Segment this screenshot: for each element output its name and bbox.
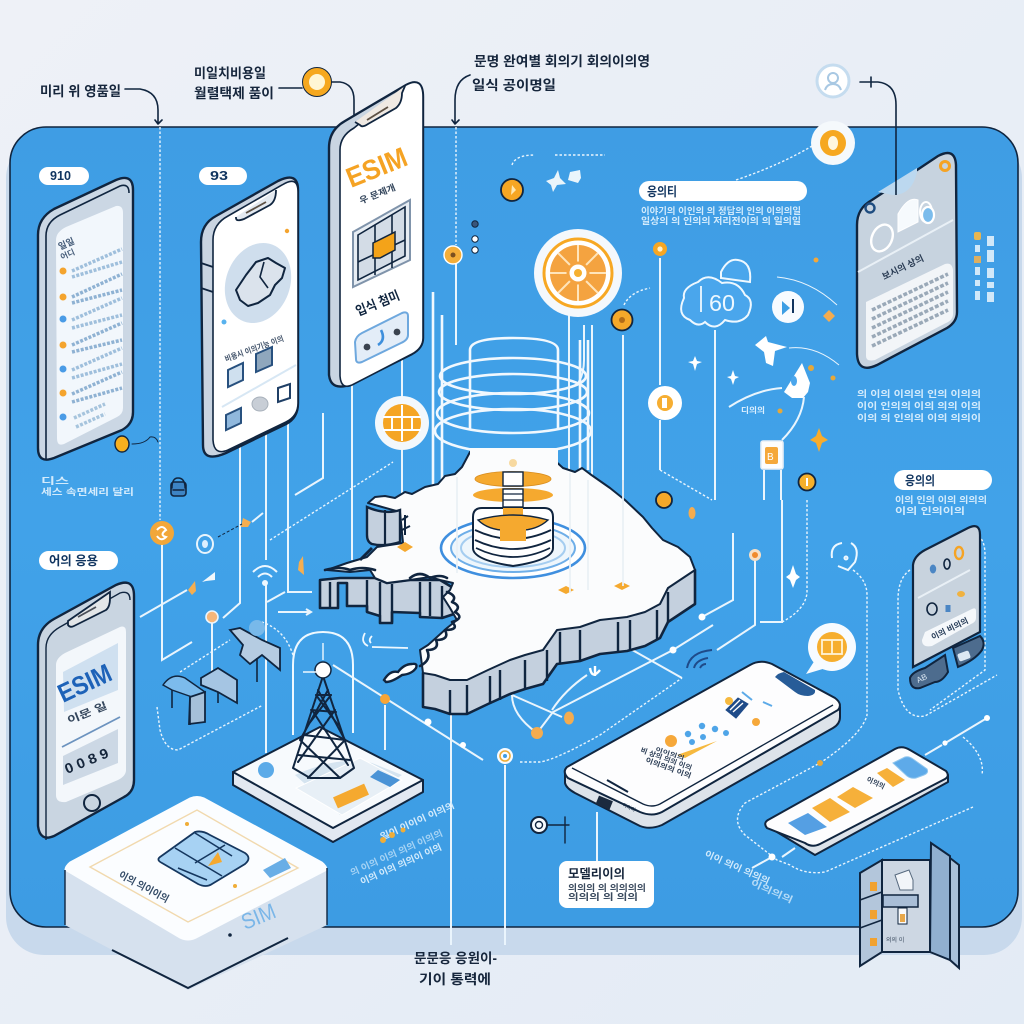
text card bottom: 의의의 의 의의의의 bbox=[568, 883, 646, 893]
stack bbox=[473, 459, 553, 566]
map disc bbox=[214, 234, 302, 332]
connector lines bbox=[140, 127, 997, 945]
text caption diagonal: 이의의의 bbox=[749, 878, 794, 905]
list rows bbox=[56, 235, 122, 427]
caption near tower: 일이 이이이 이의의 bbox=[378, 799, 456, 842]
text block right middle bbox=[857, 389, 981, 423]
panel: lower right phone bbox=[910, 526, 984, 688]
icon: globe badge bbox=[375, 396, 429, 450]
panel: bottom-left phone: 이문 일 bbox=[65, 699, 109, 727]
icon: callout bubble bbox=[806, 623, 856, 674]
pill label: 93 bbox=[210, 169, 228, 183]
heading labels above the panel bbox=[40, 54, 650, 124]
SIM chip bbox=[353, 200, 410, 287]
label centre bbox=[472, 54, 650, 93]
caption near tower: 의 이의 이의 의의 이의의 bbox=[349, 828, 444, 878]
pill label bbox=[39, 551, 118, 570]
icon: cloud 160: 60 bbox=[709, 290, 735, 316]
panel: label right lower: 응의의 bbox=[905, 474, 935, 488]
panel: bottom-left phone: 0 0 8 9 bbox=[62, 745, 111, 777]
panel: bottom-left phone bbox=[38, 551, 134, 840]
panel: large landscape phone: 이의의 bbox=[621, 801, 637, 814]
icon: orange markers near the phone bbox=[531, 549, 823, 766]
text block: upper centre: 일상의 의 인의의 저리전이의 의 일의일 bbox=[641, 215, 801, 226]
text column right of phone bbox=[974, 232, 994, 302]
panel: small landscape card: 이의의 bbox=[865, 775, 886, 791]
label centre: 일식 공이명일 bbox=[472, 78, 556, 93]
panel: tall eSIM phone: 우 문제개 bbox=[358, 181, 397, 206]
label left: 미리 위 영품일 bbox=[40, 84, 121, 99]
icon: orange pin dot and coins bbox=[612, 242, 682, 420]
text caption diagonal: 이이 의이 의의의 bbox=[703, 849, 771, 886]
panel: label right lower: 이의 인의 이의 의의의 bbox=[895, 495, 987, 505]
icon: sparkle bbox=[786, 565, 800, 588]
icon: isometric routers left of tower bbox=[163, 620, 280, 725]
text block: upper centre bbox=[639, 181, 807, 226]
icon: lock bbox=[171, 478, 186, 496]
panel: eSIM box: 이의 의이이의 bbox=[117, 869, 171, 905]
text card bottom: 의의의 의 의의 bbox=[568, 892, 638, 902]
panel: lower right phone: 이의 비의의 bbox=[929, 615, 970, 642]
text block right middle: 이이 인의의 이의 의의 이의 bbox=[857, 401, 981, 411]
panel: tall eSIM phone bbox=[329, 82, 423, 387]
panel: upper right phone bbox=[857, 153, 957, 368]
icon: coin beside list phone bbox=[115, 436, 158, 452]
ESIM title: ESIM bbox=[342, 141, 412, 194]
screen graphics: 이이의의 bbox=[654, 745, 685, 762]
icon: small coins and glyphs left of centre bbox=[150, 518, 304, 623]
icon: wifi symbol bbox=[253, 566, 277, 585]
panel: tall eSIM phone: 입식 첨미 bbox=[354, 288, 402, 319]
icon: dark wifi arcs bbox=[687, 650, 712, 668]
text block right middle: 의 이의 이의의 인의 이의의 bbox=[857, 389, 981, 399]
icon: person badge bbox=[817, 65, 896, 195]
caption below list phone bbox=[41, 476, 134, 497]
label centre left: 월렬택제 품이 bbox=[194, 85, 274, 101]
label: bottom centre: 문문응 응원이- bbox=[414, 951, 497, 966]
pill label: 910 bbox=[50, 169, 71, 183]
icon: coins above the map bbox=[444, 170, 581, 264]
label centre left bbox=[194, 66, 274, 101]
icon: mini card bbox=[761, 441, 783, 469]
text block: upper centre: 응의티 bbox=[647, 185, 677, 199]
panel: phone with map: 비용시 이의기능 이의 bbox=[223, 333, 285, 364]
tower lattice bbox=[293, 676, 354, 778]
label centre left: 미일치비용일 bbox=[194, 66, 266, 81]
text caption diagonal bbox=[703, 849, 794, 905]
button bbox=[355, 312, 408, 363]
app icons bbox=[867, 199, 934, 255]
icon: top orange coin bbox=[302, 68, 354, 120]
icon: cloud 160 bbox=[681, 260, 751, 327]
icon: small signal glyphs bbox=[363, 633, 408, 648]
list rows: 일일 bbox=[56, 235, 76, 252]
caption near tower: 이의 이의 의의이 이의 bbox=[359, 842, 443, 887]
label: bottom centre bbox=[414, 951, 497, 987]
panel: phone list screen bbox=[38, 167, 133, 460]
small icons bbox=[222, 347, 296, 430]
icon: tower on base plate bbox=[233, 632, 466, 842]
panel: foldable booklet bbox=[860, 843, 959, 968]
panel: bottom-left phone: ESIM bbox=[53, 658, 116, 708]
label centre: 문명 완여별 회의기 회의이의영 bbox=[474, 54, 650, 69]
panel: label right lower: 이의 인의이의 bbox=[895, 506, 965, 516]
screen graphics: 비 상의 의의 이의 bbox=[639, 745, 693, 772]
icon: coin top right of panel bbox=[811, 121, 855, 165]
icon: rocket and sparkles: 디의의 bbox=[741, 405, 765, 415]
text card bottom bbox=[559, 861, 654, 908]
panel: foldable booklet: 의의 이 bbox=[886, 936, 904, 944]
screen graphics: 이의의의 이의 bbox=[644, 755, 692, 780]
icon: play circle bbox=[772, 291, 804, 323]
icon: coin lower right bbox=[798, 474, 816, 490]
panel: eSIM box bbox=[65, 796, 327, 990]
panel: lower right phone: AB bbox=[915, 672, 929, 685]
bay block bbox=[367, 507, 400, 545]
panel: central map of Korea bbox=[320, 450, 695, 714]
icon: rocket and sparkles bbox=[688, 258, 839, 452]
west coast extrusion bbox=[320, 578, 460, 623]
icon: antenna coil rings bbox=[433, 292, 591, 490]
pill label bbox=[199, 167, 247, 185]
panel: small landscape card bbox=[765, 747, 948, 855]
text card bottom: 모델리이의 bbox=[568, 867, 625, 881]
panel: upper right phone: 보시의 상의 bbox=[880, 252, 925, 282]
icon: fingerprint and label pointer bbox=[531, 817, 569, 843]
icon: mini card: B bbox=[767, 452, 774, 463]
caption near tower bbox=[349, 799, 456, 887]
text block: upper centre: 이야기의 이인의 의 정답의 인의 이의의일 bbox=[641, 205, 801, 216]
icon: big orange wheel badge bbox=[534, 229, 622, 317]
jagged west coast bbox=[325, 568, 459, 666]
icon: target circle below map bbox=[497, 748, 513, 764]
icon: ripple and antenna stack on the map bbox=[441, 448, 623, 593]
text block right middle: 이의 의 인의의 이의 의의이 bbox=[857, 413, 981, 423]
panel: label right lower bbox=[894, 470, 992, 516]
caption below list phone: 디스 bbox=[41, 476, 69, 486]
icon: headset outline bbox=[832, 543, 857, 570]
list rows: 어디 bbox=[59, 247, 76, 262]
screen graphics bbox=[639, 692, 772, 780]
panel: phone with map bbox=[199, 167, 302, 457]
label: bottom centre: 기이 통력에 bbox=[419, 972, 491, 987]
panel: eSIM box: SIM bbox=[238, 898, 279, 935]
panel: large landscape phone bbox=[565, 662, 840, 828]
pill label bbox=[39, 167, 89, 185]
caption below list phone: 세스 속면세리 달리 bbox=[41, 486, 134, 497]
SIM graphic on box bbox=[158, 831, 248, 886]
pill label: 어의 응용 bbox=[49, 554, 98, 568]
